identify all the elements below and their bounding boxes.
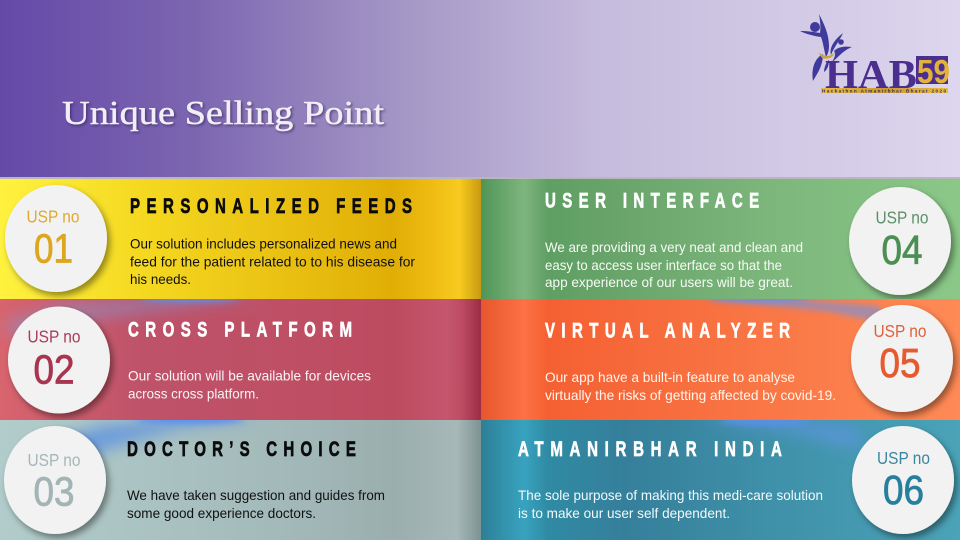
body text: We have taken suggestion and guides from: [127, 487, 385, 503]
title: Unique Selling Point: [62, 95, 385, 132]
badge 03: USP no: [28, 450, 80, 470]
body text: app experience of our users will be great.: [545, 274, 793, 290]
heading: DOCTOR’S CHOICE: [127, 436, 356, 461]
body text: [127, 487, 385, 521]
body text: [128, 368, 371, 402]
panel: USP 06 atmanirbhar india: [481, 417, 960, 540]
body text: Our solution will be available for devices: [128, 368, 371, 384]
body text: virtually the risks of getting affected by covid-19.: [545, 387, 836, 403]
panel: USP 03 doctor's choice: [0, 416, 481, 540]
badge 04: [849, 187, 951, 295]
logo: HAB59: [800, 14, 950, 97]
badge 05: USP no: [874, 321, 926, 341]
panel: USP 01 personalized feeds: [0, 179, 481, 299]
badge 02: [8, 306, 110, 414]
heading: PERSONALIZED FEEDS: [130, 193, 412, 218]
badge 06: USP no: [877, 448, 930, 468]
body text: We are providing a very neat and clean and: [545, 239, 803, 255]
badge 03: [4, 426, 106, 534]
badge 01: [5, 185, 107, 292]
badge 06: 06: [883, 467, 924, 513]
badge 03: 03: [34, 468, 74, 514]
badge 05: 05: [880, 340, 920, 386]
body text: across cross platform.: [128, 386, 259, 402]
badge 01: USP no: [26, 206, 80, 226]
body text: [130, 236, 415, 287]
body text: [545, 369, 836, 403]
heading: CROSS PLATFORM: [128, 317, 352, 341]
badge 04: 04: [882, 227, 922, 273]
body text: feed for the patient related to to his disease for: [130, 254, 415, 270]
header band: [0, 0, 960, 179]
badge 02: USP no: [28, 326, 80, 346]
badge 02: 02: [34, 346, 74, 392]
heading: ATMANIRBHAR INDIA: [518, 436, 782, 461]
body text: easy to access user interface so that the: [545, 257, 782, 273]
body text: [545, 239, 803, 290]
body text: Our app have a built-in feature to analyse: [545, 369, 795, 385]
icon: dancing figures: [800, 14, 852, 81]
wordmark 59: 59: [917, 53, 950, 90]
body text: [518, 487, 823, 521]
panel: USP 04 user interface: [481, 179, 960, 299]
panel: USP 05 virtual analyzer: [481, 296, 960, 420]
badge 06: [852, 426, 954, 534]
body text: Our solution includes personalized news and: [130, 236, 397, 252]
heading: USER INTERFACE: [545, 188, 759, 212]
badge 04: USP no: [876, 208, 928, 228]
body text: is to make our user self dependent.: [518, 505, 730, 521]
body text: his needs.: [130, 271, 191, 287]
panel: USP 02 cross platform: [0, 296, 481, 420]
body text: some good experience doctors.: [127, 505, 316, 521]
icon: gold waist swoosh: [818, 52, 834, 59]
wordmark HAB: HAB: [825, 51, 917, 97]
badge 01: 01: [34, 226, 73, 272]
body text: The sole purpose of making this medi-care solution: [518, 487, 823, 503]
tagline bar: Hackathon Atmanirbhar Bharat 2020: [822, 88, 946, 93]
badge 05: [851, 305, 953, 412]
heading: VIRTUAL ANALYZER: [545, 318, 790, 342]
